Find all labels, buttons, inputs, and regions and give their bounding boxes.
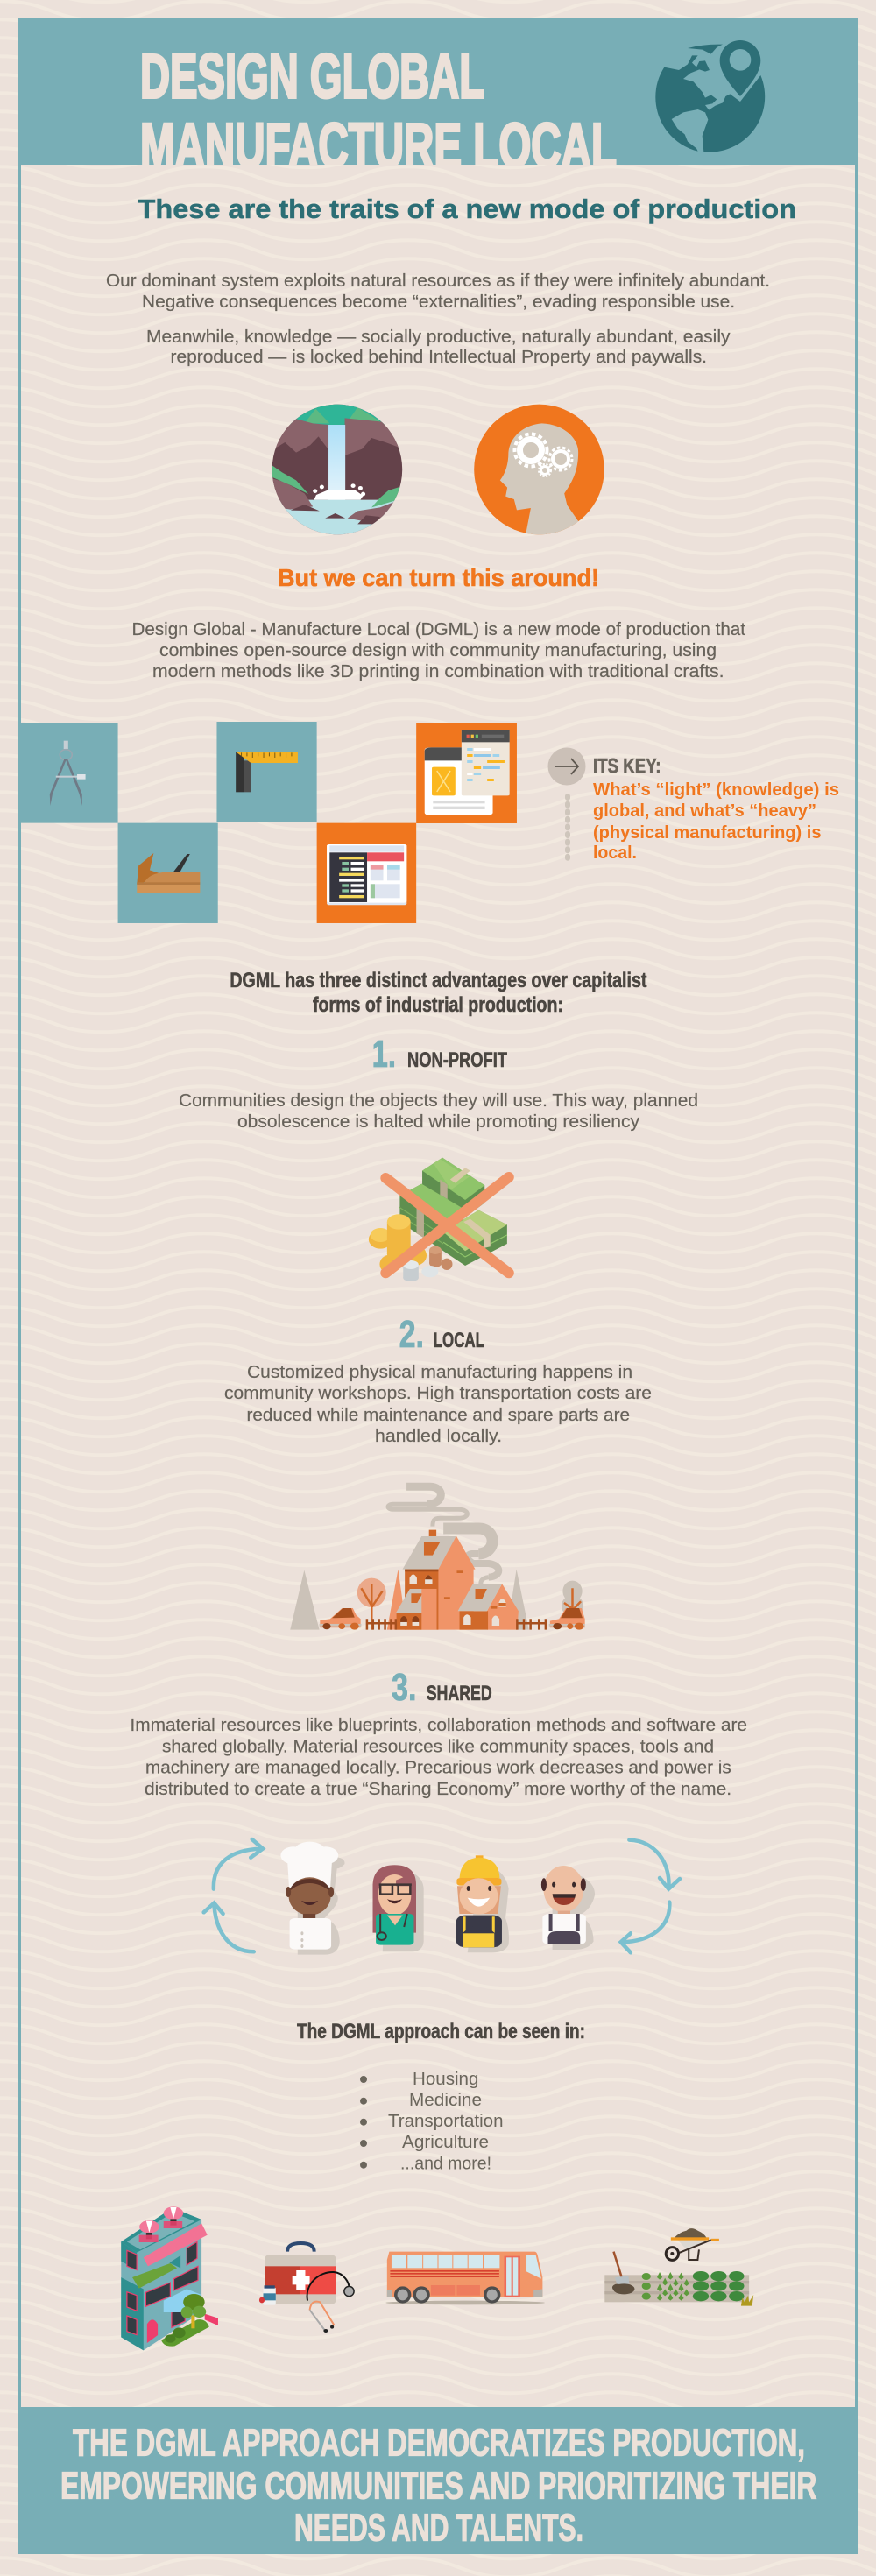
intro text block: Negative consequences become “externalities”, evading responsible use. [142,292,735,312]
title: DESIGN GLOBAL [140,42,484,112]
section 2 heading: local: 2. [399,1313,424,1356]
DGML definition text: Design Global - Manufacture Local (DGML) is a new mode of production that [131,619,745,639]
section 2 text: community workshops. High transportation costs are [224,1383,652,1403]
icon: head with gears [474,405,604,537]
section 3 text: machinery are managed locally. Precarious work decreases and power is [145,1758,731,1778]
orange call to action heading: But we can turn this around! [278,564,599,591]
panel: software windows tile [317,823,416,923]
section 1 heading: non-profit: NON-PROFIT [407,1048,507,1072]
icon: bus [385,2252,545,2304]
bulleted list of sectors: Housing [413,2070,478,2089]
person: farmer [541,1866,595,1950]
intro text block: reproduced — is locked behind Intellectual Property and paywalls. [170,347,707,367]
person: doctor [373,1865,424,1951]
section 1 text: Communities design the objects they will use. This way, planned [179,1090,698,1111]
its key callout [593,755,839,863]
section 2 text: Customized physical manufacturing happens in [247,1362,632,1382]
header banner [18,18,858,180]
bulleted list of sectors: Transportation [388,2112,503,2131]
DGML definition text: modern methods like 3D printing in combination with traditional crafts. [152,661,724,681]
intro text block: Our dominant system exploits natural resources as if they were infinitely abundant. [106,271,770,291]
advantages heading [230,969,646,1017]
footer banner [18,2407,858,2554]
advantages heading: forms of industrial production: [313,993,563,1017]
advantages heading: DGML has three distinct advantages over capitalist [230,969,646,992]
person: construction worker [456,1855,509,1952]
icon: globe with map pin [655,40,765,152]
section 2 text: reduced while maintenance and spare parts are [247,1405,630,1425]
icon: waterfall circle [268,403,408,537]
icon: medical kit [259,2243,354,2333]
sector icons row [121,2206,753,2350]
approach heading: The DGML approach can be seen in: [297,2020,585,2043]
panel: plane tile [118,823,218,923]
panel: compass tile [18,723,118,823]
checker panel: tools and software [18,722,517,923]
section 1 heading: non-profit: 1. [372,1033,396,1076]
bulleted list of sectors: ...and more! [400,2155,491,2174]
section 3 text: distributed to create a true “Sharing Economy” more worthy of the name. [145,1779,731,1799]
arrows: cycle [204,1839,680,1952]
icon: crossed out money [369,1158,509,1281]
section 2 text: handled locally. [375,1426,502,1446]
section 1 heading: non-profit [372,1033,507,1076]
section 2 heading: local [399,1313,484,1356]
section 1 text: obsolescence is halted while promoting resiliency [237,1112,640,1132]
icon: farm [604,2228,753,2306]
section 3 text: Immaterial resources like blueprints, collaboration methods and software are [130,1715,747,1735]
its key callout: local. [593,843,637,863]
section 3 text: shared globally. Material resources like community spaces, tools and [162,1737,714,1757]
section 3 heading: shared [392,1666,492,1709]
section 3 heading: shared: 3. [392,1666,417,1709]
icon: village [290,1486,585,1630]
footer text [60,2421,816,2549]
its key callout: What’s “light” (knowledge) is [593,780,839,800]
title [142,53,617,165]
its key callout: global, and what’s “heavy” [593,801,816,821]
people with circular arrows [204,1839,680,1955]
panel: code editor tile [416,723,517,823]
icon: housing [121,2206,218,2350]
section 3 heading: shared: SHARED [427,1682,492,1705]
panel: ruler tile [216,722,317,822]
bulleted list of sectors [360,2070,503,2174]
intro text block [106,271,770,367]
DGML definition text [131,619,745,681]
bulleted list of sectors: Agriculture [402,2133,489,2152]
section 2 text [224,1362,652,1446]
icon: arrow circle with dotted line [548,748,585,858]
its key callout: ITS KEY: [593,755,661,779]
section 1 text [179,1090,698,1132]
intro text block: Meanwhile, knowledge — socially productive, naturally abundant, easily [146,327,731,347]
person: chef [280,1842,344,1955]
section 2 heading: local: LOCAL [434,1329,484,1352]
bulleted list of sectors: Medicine [409,2091,482,2110]
footer text: NEEDS AND TALENTS. [294,2507,583,2549]
section 3 text [130,1715,747,1799]
its key callout: (physical manufacturing) is [593,823,822,843]
subtitle heading: These are the traits of a new mode of production [138,194,796,224]
title: MANUFACTURE LOCAL [140,112,617,180]
DGML definition text: combines open-source design with community manufacturing, using [159,640,717,660]
